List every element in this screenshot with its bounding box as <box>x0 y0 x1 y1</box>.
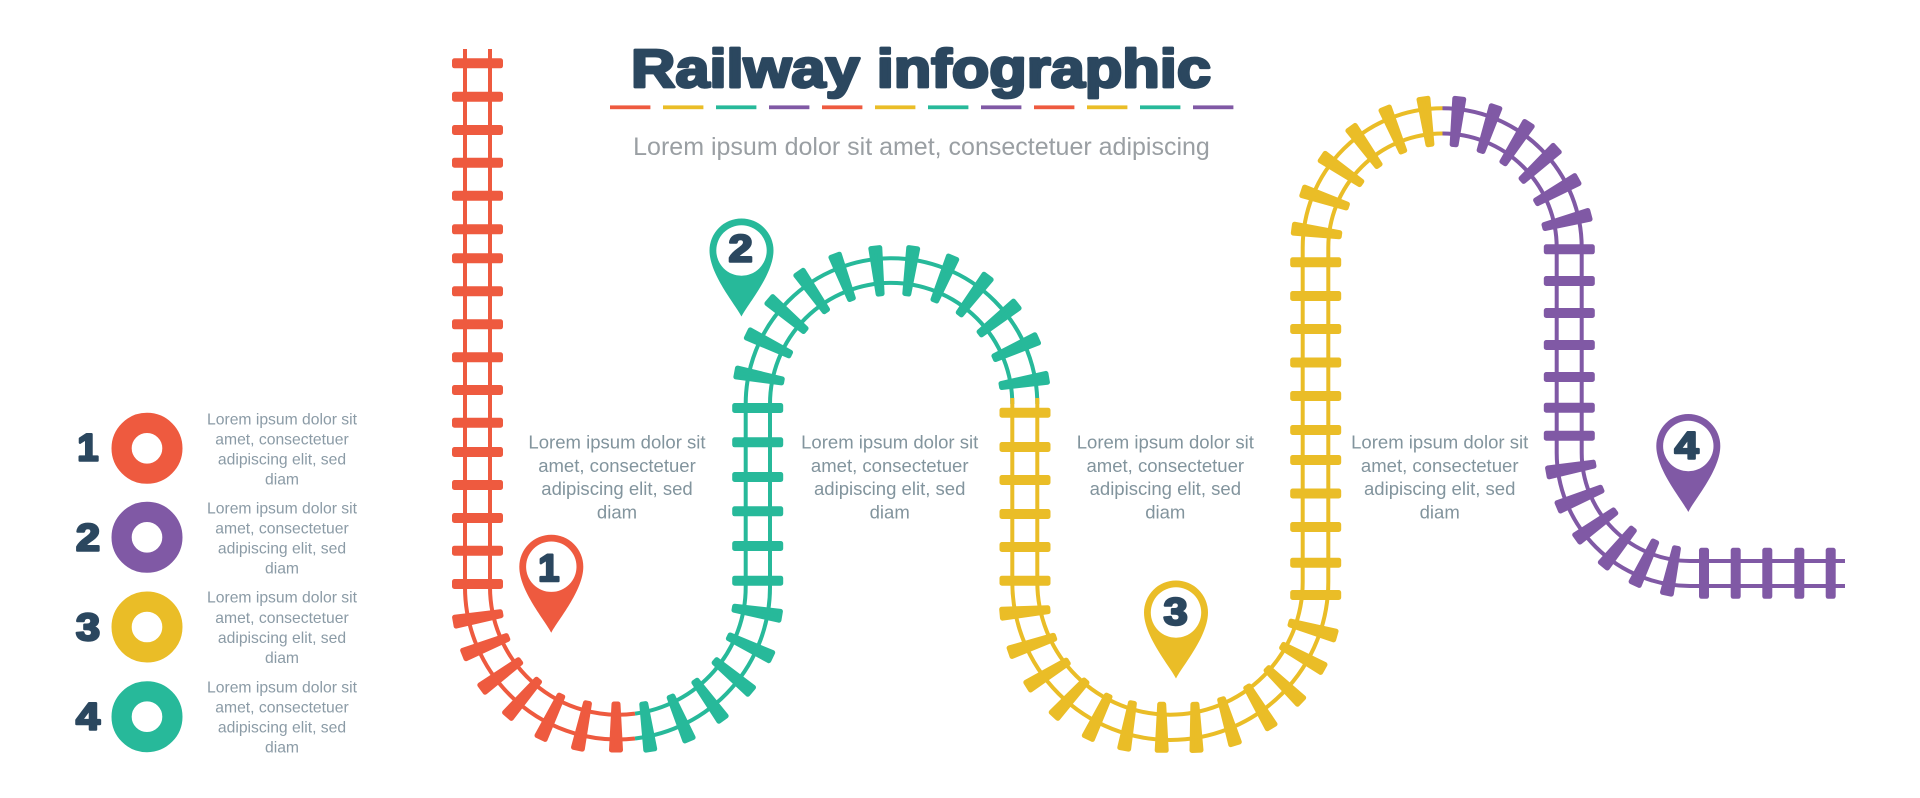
text block: stop 1: adipiscing elit, sed <box>541 478 693 499</box>
text block: stop 1 <box>528 431 706 523</box>
track section: yellow <box>1002 98 1442 750</box>
legend row 1: diam <box>265 471 299 488</box>
legend row 3 <box>76 590 358 667</box>
text block: stop 1: Lorem ipsum dolor sit <box>528 431 706 452</box>
legend row 2: diam <box>265 560 299 577</box>
text block: stop 4: diam <box>1420 502 1460 523</box>
title: Railway infographic <box>631 39 1211 99</box>
legend row 1: adipiscing elit, sed <box>218 451 346 468</box>
legend row 4 <box>76 680 358 757</box>
track section: teal <box>635 248 1047 750</box>
legend row 3: adipiscing elit, sed <box>218 630 346 647</box>
text block: stop 3: Lorem ipsum dolor sit <box>1077 431 1255 452</box>
text block: stop 1: diam <box>597 502 637 523</box>
text block: stop 4: Lorem ipsum dolor sit <box>1351 431 1529 452</box>
legend row 4: diam <box>265 740 299 757</box>
map pin 3 <box>1144 580 1208 678</box>
legend row 3: 3 <box>76 607 100 649</box>
legend row 2: 2 <box>76 517 100 559</box>
legend row 1: 1 <box>77 427 99 469</box>
legend row 4: 4 <box>76 696 100 738</box>
legend row 3: Lorem ipsum dolor sit <box>207 590 358 607</box>
map pin 1 <box>519 535 583 633</box>
text block: stop 3: amet, consectetuer <box>1086 455 1244 476</box>
text block: stop 3: diam <box>1145 502 1185 523</box>
track section: purple <box>1442 98 1845 596</box>
legend row 4: Lorem ipsum dolor sit <box>207 680 358 697</box>
text block: stop 2 <box>801 431 979 523</box>
map pin 3: 3 <box>1164 592 1188 634</box>
text block: stop 3: adipiscing elit, sed <box>1090 478 1241 499</box>
legend row 2: amet, consectetuer <box>215 520 349 537</box>
legend row 2: adipiscing elit, sed <box>218 540 346 557</box>
map pin 2 <box>710 218 774 316</box>
title dashed colour divider <box>610 105 1233 109</box>
subtitle: Lorem ipsum dolor sit amet, consectetuer adipiscing <box>633 133 1210 161</box>
map pin 1: 1 <box>538 548 559 590</box>
text block: stop 2: amet, consectetuer <box>811 455 969 476</box>
text block: stop 4: adipiscing elit, sed <box>1364 478 1515 499</box>
legend row 3: diam <box>265 650 299 667</box>
text block: stop 3 <box>1077 431 1255 523</box>
map pin 4 <box>1656 414 1720 512</box>
map pin 4: 4 <box>1675 426 1699 468</box>
track section: red <box>454 49 635 750</box>
legend row 1 <box>77 411 358 488</box>
legend row 4: amet, consectetuer <box>215 700 349 717</box>
text block: stop 2: Lorem ipsum dolor sit <box>801 431 979 452</box>
map pin 2: 2 <box>729 228 753 270</box>
text block: stop 4: amet, consectetuer <box>1361 455 1519 476</box>
legend row 1: amet, consectetuer <box>215 431 349 448</box>
text block: stop 2: adipiscing elit, sed <box>814 478 965 499</box>
legend row 4: adipiscing elit, sed <box>218 720 346 737</box>
legend row 1: Lorem ipsum dolor sit <box>207 411 358 428</box>
legend row 3: amet, consectetuer <box>215 610 349 627</box>
text block: stop 4 <box>1351 431 1529 523</box>
legend row 2: Lorem ipsum dolor sit <box>207 500 358 517</box>
text block: stop 2: diam <box>870 502 910 523</box>
legend row 2 <box>76 500 358 577</box>
text block: stop 1: amet, consectetuer <box>538 455 696 476</box>
